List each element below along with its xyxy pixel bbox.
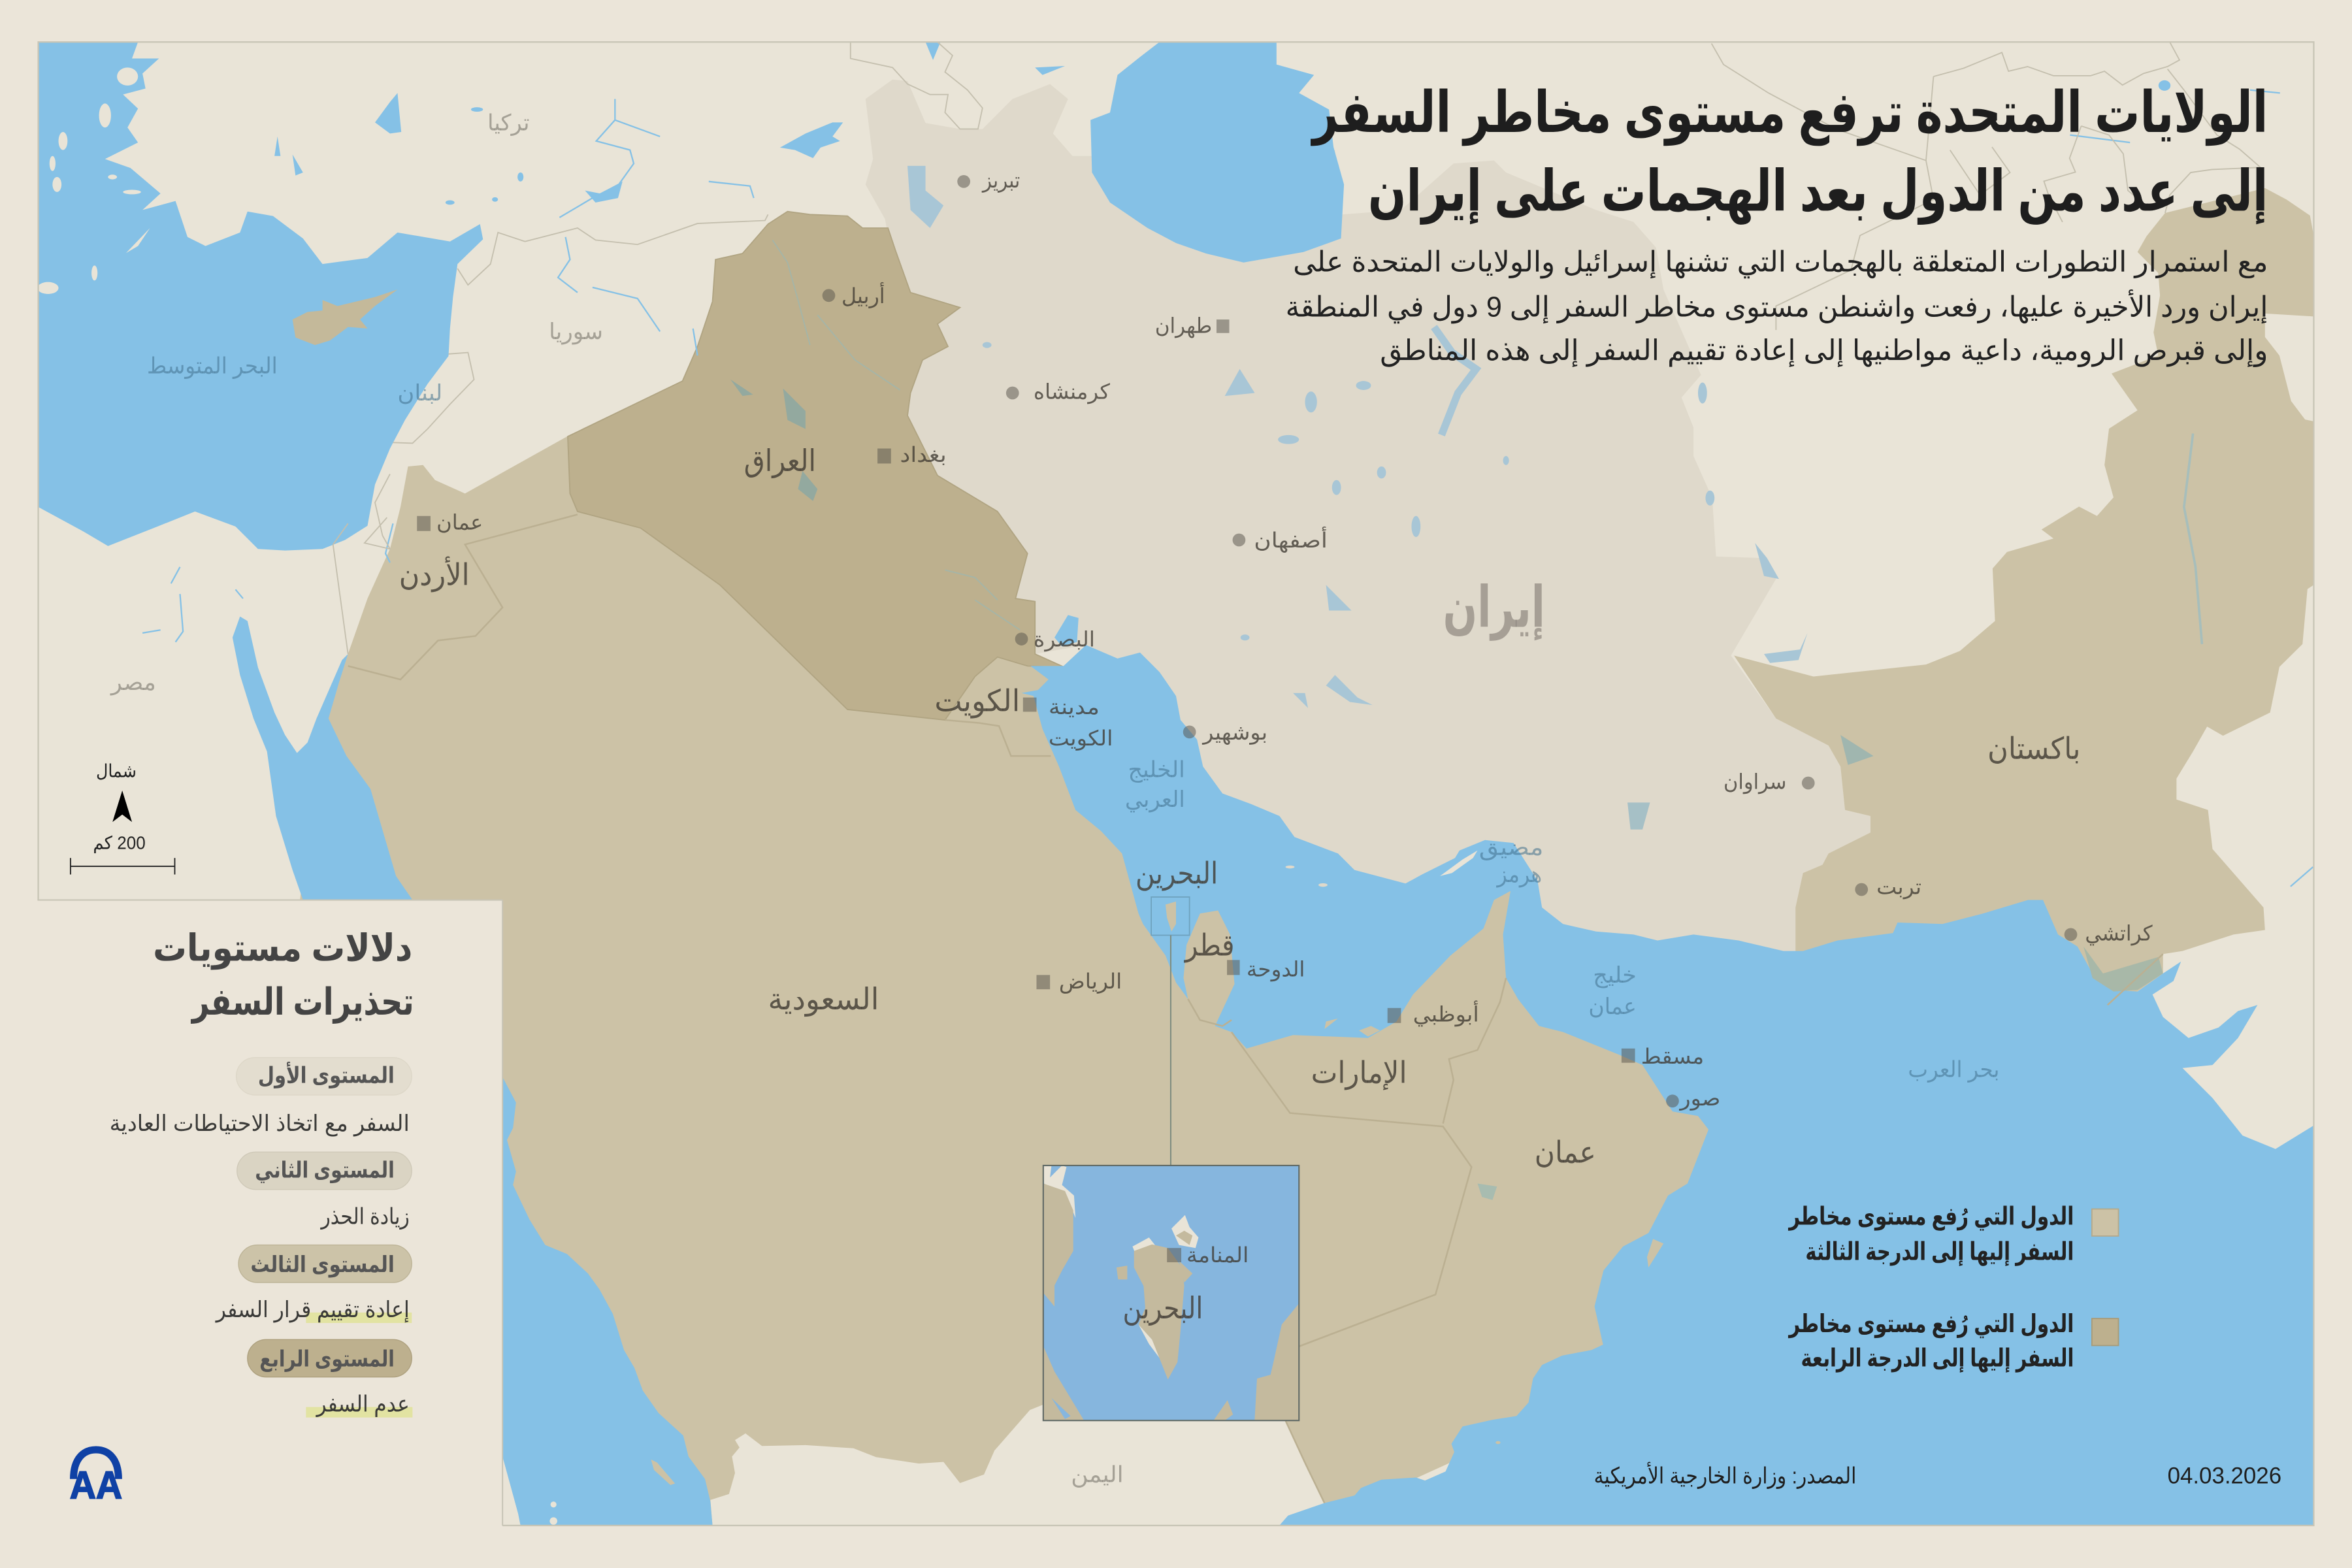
city: Amman: عمان [436, 510, 483, 534]
label: Iraq: العراق [744, 444, 816, 479]
intro paragraph: إيران ورد الأخيرة عليها، رفعت واشنطن مستوى مخاطر السفر إلى 9 دول في المنطقة [1286, 289, 2268, 323]
intro paragraph: وإلى قبرص الرومية، داعية مواطنيها إلى إعادة تقييم السفر إلى هذه المناطق [1380, 335, 2268, 367]
panel: travel advisory levels legend [0, 900, 502, 1568]
Red Sea north and gulfs [233, 617, 412, 900]
city: Riyadh [1036, 970, 1122, 994]
intro paragraph [1286, 247, 2268, 367]
city: Baghdad: بغداد [900, 443, 947, 466]
map legend: level three countries [1788, 1203, 2119, 1267]
international borders [333, 42, 2261, 1503]
label: Jordan: الأردن [399, 555, 470, 592]
Sudan coast and Red Sea islands [502, 1456, 675, 1526]
city: Tabriz: تبريز [981, 169, 1020, 193]
logo: Anadolu Agency: AA [70, 1463, 122, 1507]
city: Karachi: كراتشي [2085, 922, 2153, 946]
city: Turbat: تربت [1876, 875, 1921, 899]
inset label: Bahrain: البحرين [1122, 1291, 1203, 1326]
level three description with highlight: إعادة تقييم قرار السفر [215, 1298, 410, 1323]
Caspian Sea [1090, 42, 1344, 263]
level four description with highlight: عدم السفر [316, 1392, 410, 1417]
intro paragraph: مع استمرار التطورات المتعلقة بالهجمات التي تشنها إسرائيل والولايات المتحدة على [1293, 247, 2268, 279]
map legend: level four countries [1788, 1311, 2119, 1373]
level four badge [248, 1339, 412, 1377]
Mediterranean Sea [39, 42, 483, 551]
Bahrain locator box and leader line [1151, 897, 1190, 1166]
label: Saudi Arabia: السعودية [768, 982, 879, 1017]
label: Lebanon: لبنان [397, 381, 442, 406]
city: Baghdad [877, 443, 947, 466]
map legend: level four countries: السفر إليها إلى الدرجة الرابعة [1801, 1345, 2074, 1373]
city: Turbat [1855, 875, 1921, 899]
Aegean islands [37, 67, 150, 294]
islands in the Gulf [1166, 851, 1663, 1444]
north arrow [96, 760, 137, 822]
title [1311, 81, 2268, 225]
city: Kuwait City: الكويت [1049, 727, 1113, 751]
city: Sur [1666, 1086, 1720, 1111]
level three badge: المستوى الثالث [250, 1252, 395, 1278]
label: Strait of Hormuz: مضيق [1479, 836, 1543, 861]
inset city: Manama: المنامة [1186, 1243, 1249, 1267]
map legend: level three countries: السفر إليها إلى الدرجة الثالثة [1805, 1239, 2074, 1267]
label: Arabian Gulf [1125, 757, 1185, 813]
panel heading: تحذيرات السفر [190, 981, 414, 1024]
city: Bushehr: بوشهير [1201, 721, 1267, 745]
label: Arabian Gulf: العربي [1125, 787, 1185, 813]
city: Isfahan [1233, 527, 1328, 553]
city: Erbil: أربيل [841, 282, 885, 308]
label: Strait of Hormuz [1479, 836, 1543, 888]
country at level four: Iraq [568, 212, 1065, 720]
label: Turkey: تركيا [487, 111, 529, 137]
lakes and rivers [142, 42, 2313, 1200]
panel heading [153, 928, 414, 1024]
label: Qatar: قطر [1184, 928, 1235, 964]
map legend: level three countries: الدول التي رُفع مستوى مخاطر [1788, 1203, 2074, 1231]
Persian Gulf, Gulf of Oman and Arabian Sea [1022, 645, 2315, 1527]
level four badge: المستوى الرابع [259, 1347, 395, 1373]
label: Arabian Gulf: الخليج [1128, 757, 1185, 783]
label: Oman: عمان [1535, 1135, 1596, 1169]
scale bar: 200 كم [93, 832, 146, 853]
city: Kermanshah: كرمنشاه [1034, 380, 1111, 404]
label: Gulf of Oman [1588, 963, 1637, 1019]
label: UAE: الإمارات [1311, 1056, 1407, 1090]
level one badge [237, 1058, 412, 1095]
panel heading: دلالات مستويات [153, 928, 412, 970]
city: Tehran: طهران [1155, 314, 1212, 338]
scale bar [71, 832, 174, 875]
city: Abu Dhabi: أبوظبي [1413, 1001, 1479, 1027]
level one badge: المستوى الأول [258, 1062, 395, 1089]
city: Muscat: مسقط [1641, 1045, 1704, 1068]
city: Basra: البصرة [1034, 628, 1095, 652]
label: Arabian Sea: بحر العرب [1908, 1057, 1999, 1083]
city: Erbil [823, 282, 885, 308]
city: Tabriz [957, 169, 1020, 193]
level three badge [238, 1245, 412, 1282]
city: Saravan: سراوان [1723, 770, 1786, 794]
city: Kuwait City: مدينة [1049, 695, 1100, 719]
label: Iran: إيران [1443, 576, 1545, 642]
map legend: level four countries: الدول التي رُفع مستوى مخاطر [1788, 1311, 2074, 1338]
level one description: السفر مع اتخاذ الاحتياطات العادية [110, 1111, 410, 1137]
city: Kuwait City [1023, 695, 1113, 751]
city: Riyadh: الرياض [1059, 970, 1122, 994]
countries at level three: Pakistan and Afghanistan [1734, 188, 2315, 1005]
label: Yemen: اليمن [1071, 1462, 1124, 1488]
level two description: زيادة الحذر [320, 1204, 410, 1229]
countries at level three: Saudi Arabia, Jordan, Kuwait, Qatar, Bahrain, UAE, Oman [300, 436, 1725, 1526]
label: Syria: سوريا [549, 319, 603, 345]
inset map: Bahrain [1043, 1166, 1299, 1420]
city: Abu Dhabi [1388, 1001, 1479, 1027]
label: Mediterranean Sea: البحر المتوسط [147, 354, 278, 380]
label: Kuwait: الكويت [934, 683, 1020, 719]
Cyprus [293, 289, 397, 345]
label: Pakistan: باكستان [1987, 732, 2080, 766]
source: المصدر: وزارة الخارجية الأمريكية [1594, 1462, 1856, 1490]
level two badge: المستوى الثاني [255, 1158, 395, 1183]
country: Iran [866, 80, 1870, 960]
city: Doha: الدوحة [1247, 958, 1305, 982]
label: Gulf of Oman: خليج [1593, 963, 1637, 988]
north arrow: شمال [96, 760, 137, 781]
date: 04.03.2026 [2168, 1463, 2281, 1489]
label: Strait of Hormuz: هرمز [1495, 862, 1542, 888]
city: Isfahan: أصفهان [1254, 527, 1328, 553]
label: Egypt: مصر [110, 670, 156, 696]
label: Bahrain: البحرين [1135, 856, 1218, 891]
city: Sur: صور [1678, 1086, 1720, 1111]
Red Sea south [502, 1077, 713, 1526]
label: Gulf of Oman: عمان [1588, 994, 1637, 1019]
level two badge [237, 1152, 412, 1190]
